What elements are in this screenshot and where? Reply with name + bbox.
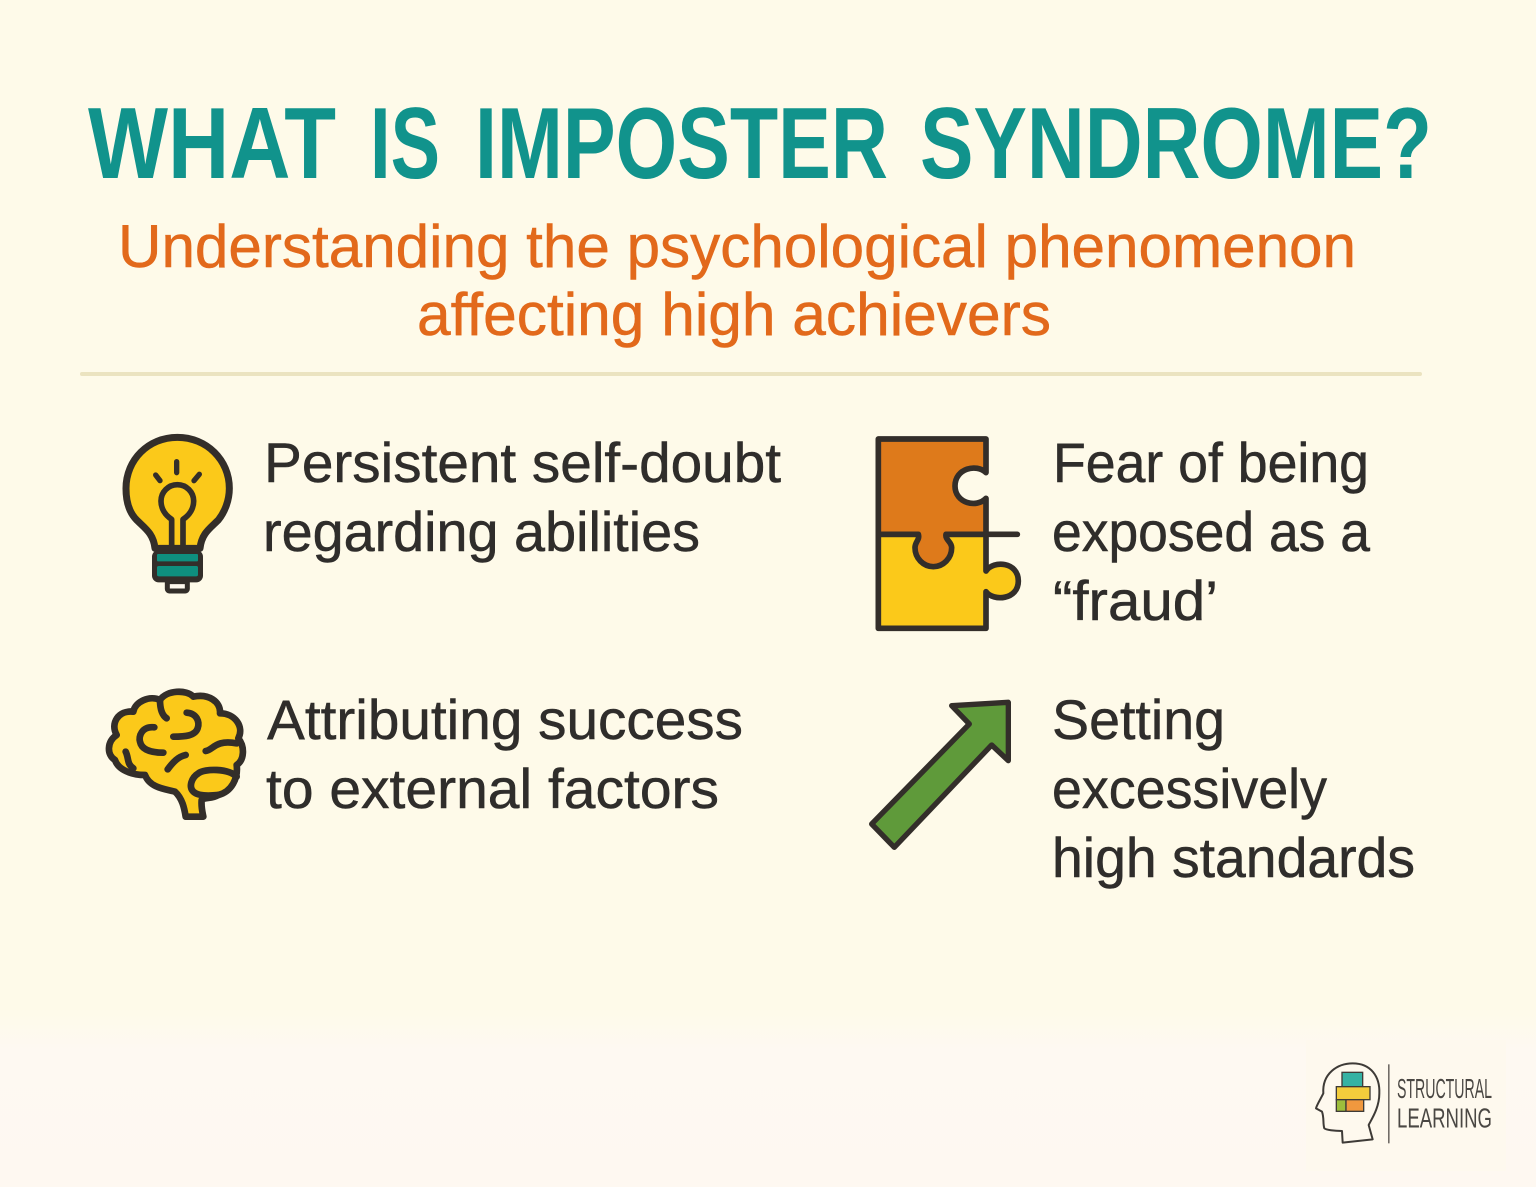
title: IMPOSTER	[475, 88, 888, 200]
icon: light bulb	[126, 437, 229, 591]
text: attributing success: to external factors	[266, 757, 719, 820]
subtitle: affecting high achievers	[417, 281, 1051, 348]
text: high standards: Setting	[1052, 688, 1225, 751]
title: WHAT	[88, 88, 336, 200]
item: attributing success	[109, 688, 743, 820]
title: IS	[370, 88, 440, 200]
subtitle	[118, 213, 1356, 348]
title	[88, 88, 1432, 200]
text: fear of being exposed: Fear of being	[1053, 431, 1369, 494]
logo: structural learning	[1306, 1040, 1506, 1171]
text: persistent self-doubt: regarding abilities	[263, 500, 700, 563]
icon: puzzle pieces	[878, 439, 1018, 628]
icon: upward arrow	[872, 702, 1008, 847]
item: fear of being exposed	[878, 431, 1371, 632]
text: attributing success: Attributing success	[267, 688, 743, 751]
text: persistent self-doubt: Persistent self-doubt	[264, 431, 781, 494]
item: high standards	[872, 688, 1415, 889]
subtitle: Understanding the psychological phenomenon	[118, 213, 1356, 280]
text: persistent self-doubt	[263, 431, 781, 563]
text: high standards: excessively	[1052, 757, 1327, 820]
text: fear of being exposed	[1052, 431, 1371, 632]
logo wordmark: LEARNING	[1397, 1102, 1492, 1134]
icon: brain	[109, 692, 243, 817]
logo icon: head with blocks	[1316, 1063, 1389, 1143]
text: fear of being exposed: “fraud’	[1053, 569, 1218, 632]
logo wordmark	[1397, 1073, 1492, 1134]
text: attributing success	[266, 688, 743, 820]
text: high standards	[1052, 688, 1415, 889]
item: persistent self-doubt	[126, 431, 781, 591]
text: high standards: high standards	[1052, 826, 1415, 889]
text: fear of being exposed: exposed as a	[1052, 500, 1371, 563]
